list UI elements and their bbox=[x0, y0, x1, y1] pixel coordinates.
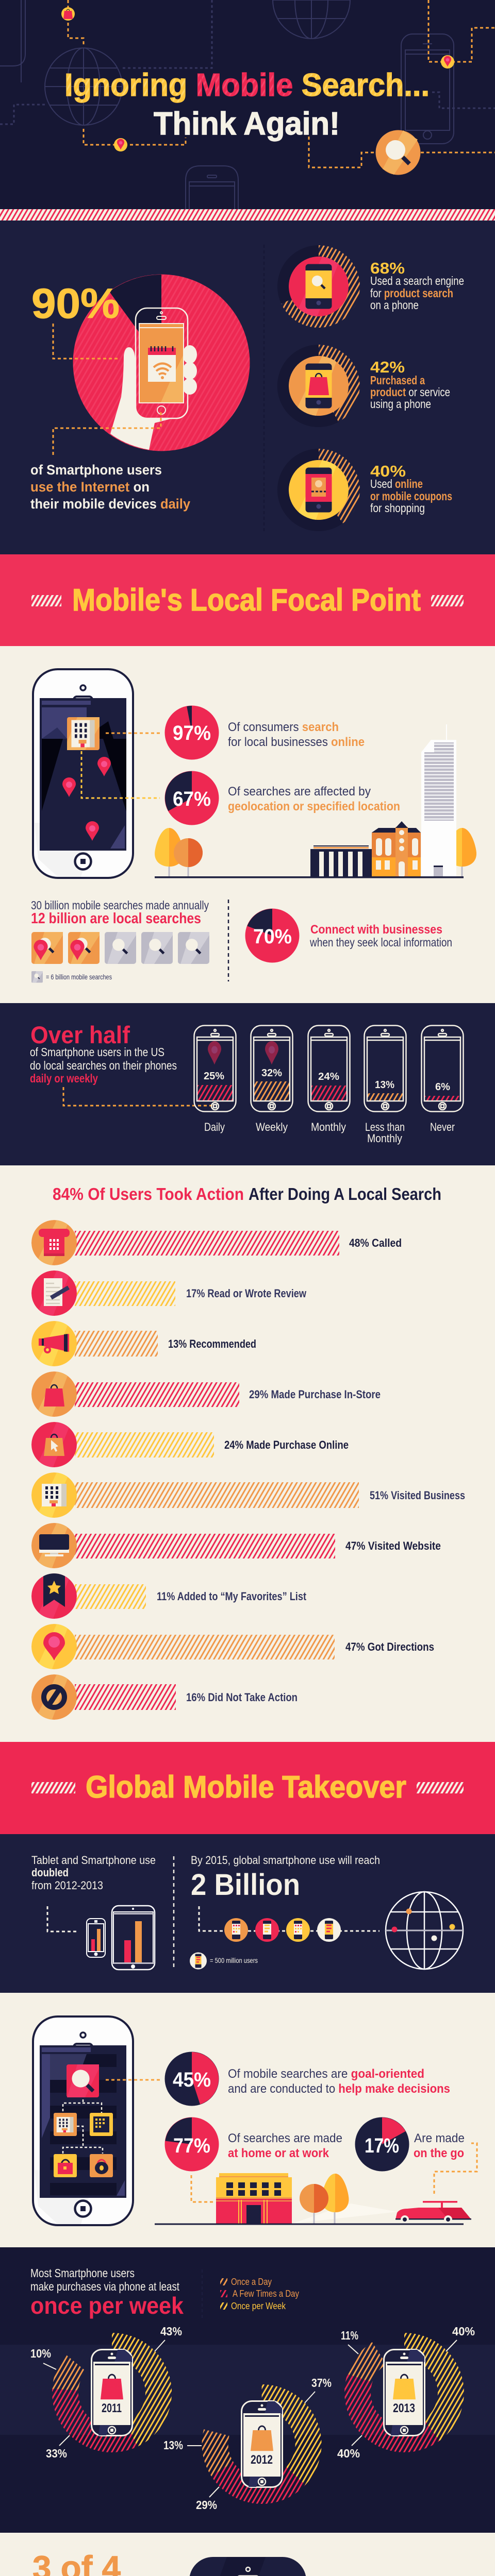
text: home or work: Of searches are made bbox=[228, 2131, 342, 2145]
bar: visited website bbox=[31, 1522, 441, 1569]
title: Think Again! bbox=[154, 106, 340, 142]
chart: daily phone bbox=[194, 1025, 236, 1133]
panel: purchases by year bbox=[0, 2247, 495, 2533]
text: 40 percent: 40% bbox=[370, 462, 406, 480]
text: once per week: once per week bbox=[30, 2292, 184, 2319]
bar: called: 48% Called bbox=[349, 1236, 402, 1249]
chart: less than monthly phone bbox=[364, 1025, 406, 1145]
header orange dashed connectors bbox=[68, 0, 495, 167]
text: over half: of Smartphone users in the US bbox=[30, 1045, 164, 1059]
bar: did not take action bbox=[31, 1673, 298, 1721]
text: 67 percent: Of searches are affected by bbox=[228, 785, 371, 799]
chart: monthly phone: Monthly bbox=[311, 1121, 346, 1133]
title: Ignoring Mobile Search... bbox=[64, 67, 430, 103]
chart: never phone bbox=[422, 1025, 463, 1133]
panel: local focal point bbox=[0, 646, 495, 1003]
chart: weekly phone: Weekly bbox=[256, 1121, 288, 1133]
banner: Global Mobile Takeover bbox=[0, 1742, 495, 1834]
labels: 2012 values: 37% bbox=[311, 2376, 332, 2389]
icon: purchase phone bbox=[277, 345, 360, 427]
text: once per week: Most Smartphone users bbox=[30, 2266, 135, 2280]
chart: 2011 donut bbox=[52, 2333, 172, 2452]
text: connect with businesses: Connect with businesses bbox=[310, 923, 442, 937]
legend: 500 million users bbox=[190, 1953, 258, 1969]
icon: coupon phone bbox=[277, 449, 360, 531]
bar: recommended: 13% Recommended bbox=[168, 1337, 256, 1350]
text: 42 percent: 42% bbox=[370, 358, 405, 376]
text: on the go bbox=[414, 2131, 465, 2160]
chart: never phone: Never bbox=[430, 1121, 455, 1133]
text: 2 billion: By 2015, global smartphone use will reach bbox=[191, 1854, 380, 1867]
text: 40 percent: Used online bbox=[370, 477, 423, 490]
chart: 17 percent pie: 17% bbox=[365, 2134, 399, 2157]
labels: 2011 values bbox=[30, 2325, 182, 2460]
bar: visited business: 51% Visited Business bbox=[370, 1489, 465, 1502]
text: tablet and smartphone use: Tablet and Smartphone use bbox=[31, 1854, 156, 1867]
chart: less than monthly phone: Monthly bbox=[367, 1132, 402, 1145]
text: 2 billion bbox=[191, 1854, 380, 1902]
legend: 6 billion: = 6 billion mobile searches bbox=[46, 973, 112, 981]
banner: Global Mobile Takeover: Global Mobile Takeover bbox=[86, 1770, 406, 1804]
text: tablet and smartphone use: from 2012-2013 bbox=[31, 1879, 103, 1892]
text: smartphone users caption: of Smartphone users bbox=[30, 462, 162, 478]
chart: 45 percent pie: 45% bbox=[173, 2069, 211, 2091]
chart: 67 percent pie: 67% bbox=[173, 788, 211, 810]
panel: follow-up actions bbox=[0, 2533, 495, 2576]
labels: 2011 values: 43% bbox=[160, 2325, 182, 2338]
text: 42 percent: Purchased a bbox=[370, 374, 425, 387]
text: 40 percent: or mobile coupons bbox=[370, 489, 452, 503]
icon: location pin lower bbox=[114, 138, 127, 151]
bar: purchase in store: 29% Made Purchase In-Store bbox=[249, 1388, 381, 1401]
header decorative outlines bbox=[0, 0, 495, 209]
text: 40 percent bbox=[370, 462, 452, 515]
icon: product search phone bbox=[277, 245, 360, 328]
text: 97 percent: for local businesses online bbox=[228, 735, 365, 749]
labels: 2013 values: 40% bbox=[452, 2325, 475, 2338]
text: over half: Over half bbox=[30, 1021, 130, 1048]
text: 68 percent bbox=[370, 259, 464, 312]
text: smartphone users caption: their mobile devices daily bbox=[30, 496, 190, 512]
bar: read or wrote review bbox=[31, 1269, 307, 1317]
text: 42 percent: product or service bbox=[370, 385, 450, 399]
text: smartphone users caption: use the Internet on bbox=[30, 479, 150, 495]
title bbox=[64, 67, 430, 142]
text: goal-oriented bbox=[228, 2067, 450, 2096]
panel: global growth bbox=[0, 1834, 495, 1993]
text: connect with businesses: when they seek local information bbox=[309, 936, 452, 949]
legend: purchase frequency: Once per Week bbox=[231, 2301, 286, 2311]
text: 42 percent bbox=[370, 358, 450, 411]
text: on the go: on the go bbox=[414, 2146, 464, 2160]
chart: 2013 donut bbox=[344, 2333, 464, 2452]
text: tablet and smartphone use: doubled bbox=[31, 1866, 69, 1879]
panel: goal-oriented bbox=[0, 1993, 495, 2247]
text: 68 percent: for product search bbox=[370, 286, 453, 300]
labels: 2013 values bbox=[337, 2325, 475, 2460]
text: 67 percent: geolocation or specified location bbox=[228, 800, 400, 814]
labels: 2012 values: 13% bbox=[163, 2438, 183, 2452]
text: once per week: make purchases via phone at least bbox=[30, 2280, 179, 2293]
chart: 2013 donut: 2013 bbox=[393, 2401, 415, 2415]
text: 30 billion mobile searches: 12 billion are local searches bbox=[31, 910, 201, 927]
legend: 500 million users: = 500 million users bbox=[210, 1956, 258, 1964]
text: 67 percent bbox=[228, 785, 400, 814]
text: connect with businesses bbox=[309, 923, 452, 949]
text: 97 percent bbox=[228, 720, 365, 749]
chart: less than monthly phone: Less than bbox=[365, 1121, 405, 1133]
chart: monthly phone: 24% bbox=[318, 1071, 339, 1082]
text: once per week bbox=[30, 2266, 184, 2319]
legend: purchase frequency: A Few Times a Day bbox=[233, 2289, 299, 2299]
illustration: phone app tree bbox=[33, 2016, 161, 2225]
chart: daily phone: Daily bbox=[204, 1121, 225, 1133]
text: 30 billion mobile searches bbox=[31, 899, 209, 927]
text: 30 billion mobile searches: 30 billion mobile searches made annually bbox=[31, 899, 209, 912]
icon: search magnifier bbox=[375, 130, 421, 175]
labels: 2011 values: 33% bbox=[46, 2447, 67, 2460]
text: over half: daily or weekly bbox=[30, 1072, 98, 1085]
banner: Mobile's Local Focal Point bbox=[0, 554, 495, 646]
text: 68 percent: Used a search engine bbox=[370, 274, 464, 287]
legend: 6 billion bbox=[31, 971, 112, 982]
text: over half bbox=[30, 1021, 177, 1085]
bar: read or wrote review: 17% Read or Wrote Review bbox=[186, 1287, 307, 1300]
text: goal-oriented: and are conducted to help make decisions bbox=[228, 2082, 450, 2096]
chart: 90 percent pie bbox=[73, 274, 250, 451]
pictogram: search tiles bbox=[31, 932, 209, 964]
chart: 70 percent pie: 70% bbox=[253, 925, 292, 948]
text: 68 percent: on a phone bbox=[370, 298, 419, 312]
chart: 2012 donut: 2012 bbox=[251, 2453, 273, 2467]
bar: got directions: 47% Got Directions bbox=[345, 1640, 434, 1653]
connector dashes bbox=[53, 324, 161, 455]
heading: 84 percent: After Doing A Local Search bbox=[249, 1184, 441, 1204]
chart: weekly phone: 32% bbox=[261, 1067, 282, 1079]
text: 40 percent: for shopping bbox=[370, 501, 425, 515]
bar: added to favorites: 11% Added to “My Favorites” List bbox=[157, 1590, 307, 1603]
chart: 97 percent pie bbox=[165, 706, 219, 759]
text: 97 percent: Of consumers search bbox=[228, 720, 339, 734]
text: smartphone users caption bbox=[30, 462, 190, 512]
chart: 77 percent pie bbox=[165, 2117, 219, 2171]
illustration: phone with map bbox=[33, 669, 161, 878]
chart: daily phone: 25% bbox=[204, 1071, 224, 1082]
text: on the go: Are made bbox=[414, 2131, 465, 2145]
bar: purchase in store bbox=[31, 1370, 381, 1418]
chart: 45 percent pie bbox=[165, 2052, 219, 2106]
bar: purchase online bbox=[31, 1421, 349, 1468]
legend: purchase frequency: Once a Day bbox=[231, 2277, 272, 2287]
icon: globe with dots bbox=[386, 1892, 463, 1969]
bar: visited business bbox=[31, 1471, 465, 1519]
illustration: building, trees and car bbox=[155, 2173, 471, 2225]
labels: 2012 values: 29% bbox=[196, 2498, 217, 2512]
chart: 2012 donut bbox=[202, 2384, 322, 2504]
text: 2 billion: 2 Billion bbox=[191, 1868, 300, 1902]
icon: shopping pin bbox=[61, 7, 75, 21]
icon: location pin right bbox=[441, 55, 454, 69]
legend: purchase frequency bbox=[220, 2277, 299, 2311]
labels: 2013 values: 11% bbox=[341, 2329, 358, 2342]
chart: monthly phone bbox=[308, 1025, 350, 1133]
text: home or work: at home or at work bbox=[228, 2146, 329, 2160]
text: home or work bbox=[228, 2131, 342, 2160]
chart: less than monthly phone: 13% bbox=[375, 1079, 394, 1091]
panel: user actions bbox=[31, 1188, 465, 1720]
stat: 90 percent: 90% bbox=[31, 280, 120, 327]
chart: 97 percent pie: 97% bbox=[173, 722, 211, 744]
illustration: cityscape bbox=[155, 724, 476, 878]
bar: added to favorites bbox=[31, 1572, 307, 1620]
text: tablet and smartphone use bbox=[31, 1854, 156, 1892]
banner: Mobile's Local Focal Point: Mobile's Local Focal Point bbox=[72, 583, 421, 617]
panel: over half bbox=[0, 1003, 495, 1165]
text: 68 percent: 68% bbox=[370, 259, 405, 277]
icon: hand holding phone bbox=[110, 308, 197, 450]
panel: smartphone use bbox=[0, 221, 495, 554]
stripe band top bbox=[0, 209, 495, 221]
chart: 17 percent pie bbox=[355, 2117, 409, 2171]
labels: 2012 values bbox=[163, 2376, 332, 2512]
panel: header background bbox=[0, 0, 495, 209]
labels: 2011 values: 10% bbox=[30, 2347, 51, 2360]
chart: tablet bars bbox=[112, 1906, 155, 1970]
chart: weekly phone bbox=[251, 1025, 293, 1133]
bar: called bbox=[31, 1219, 402, 1266]
chart: 77 percent pie: 77% bbox=[173, 2134, 210, 2157]
pictogram: 2 billion users bbox=[224, 1918, 341, 1942]
bar: visited website: 47% Visited Website bbox=[345, 1539, 441, 1552]
bar: recommended bbox=[31, 1320, 256, 1367]
heading: 84 percent: 84% Of Users Took Action bbox=[53, 1184, 244, 1204]
labels: 2013 values: 40% bbox=[337, 2447, 360, 2460]
bar: purchase online: 24% Made Purchase Online bbox=[224, 1438, 349, 1451]
bar: did not take action: 16% Did Not Take Action bbox=[186, 1691, 298, 1704]
text: 42 percent: using a phone bbox=[370, 397, 431, 411]
chart: 70 percent pie bbox=[245, 909, 299, 962]
chart: 67 percent pie bbox=[165, 771, 219, 825]
illustration: big phone with apps bbox=[189, 2557, 306, 2576]
chart: 2011 donut: 2011 bbox=[102, 2401, 122, 2415]
text: over half: do local searches on their phones bbox=[30, 1059, 177, 1072]
text: goal-oriented: Of mobile searches are goal-oriented bbox=[228, 2067, 424, 2081]
chart: never phone: 6% bbox=[435, 1081, 450, 1093]
bar: got directions bbox=[31, 1623, 434, 1670]
chart: phone bars bbox=[87, 1919, 105, 1957]
